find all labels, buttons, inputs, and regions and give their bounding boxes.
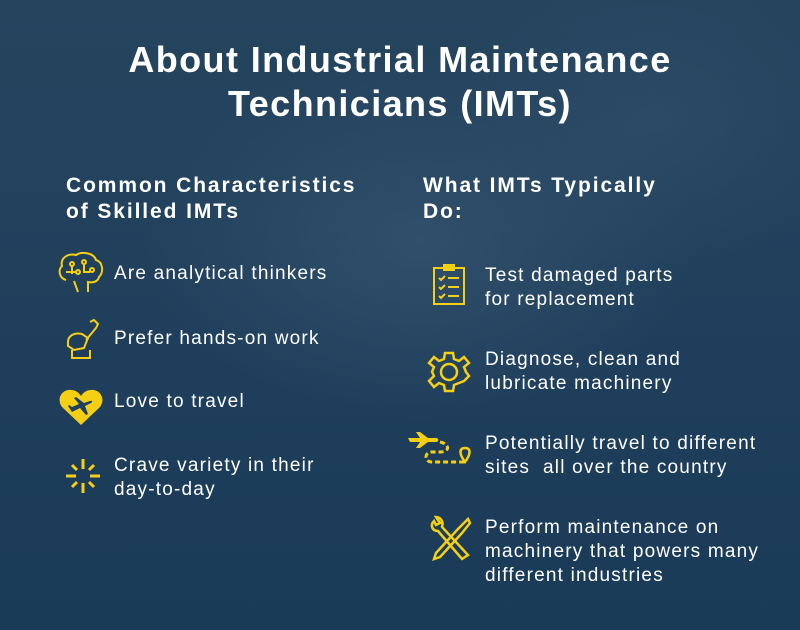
title xyxy=(128,39,672,124)
text: analytical: Are analytical thinkers xyxy=(114,263,327,284)
text: variety xyxy=(114,455,315,500)
text: variety: day-to-day xyxy=(114,479,216,500)
text: maintenance xyxy=(485,517,759,586)
icon: sparkle xyxy=(66,459,100,493)
heading: characteristics: of Skilled IMTs xyxy=(66,200,240,223)
text: travel sites: sites all over the country xyxy=(485,457,728,478)
text: diagnose xyxy=(485,349,681,394)
title: Technicians (IMTs) xyxy=(228,83,572,124)
icon: clipboard xyxy=(433,264,465,305)
heading: what IMTs do: What IMTs Typically xyxy=(423,174,657,197)
text: diagnose: Diagnose, clean and xyxy=(485,349,681,370)
text: travel: Love to travel xyxy=(114,391,245,412)
text: test parts xyxy=(485,265,673,310)
icon: gear xyxy=(427,352,471,392)
heading: what IMTs do xyxy=(423,174,657,223)
icon: heart plane xyxy=(60,390,102,425)
text: maintenance: Perform maintenance on xyxy=(485,517,719,538)
title: About Industrial Maintenance xyxy=(128,39,672,80)
heading: characteristics: Common Characteristics xyxy=(66,174,356,197)
icon: brain xyxy=(58,252,104,292)
text: test parts: Test damaged parts xyxy=(485,265,673,286)
text: hands-on: Prefer hands-on work xyxy=(114,328,320,349)
icon: hand with wrench xyxy=(67,318,100,359)
text: travel sites xyxy=(485,433,756,478)
text: maintenance: different industries xyxy=(485,565,664,586)
text: travel sites: Potentially travel to different xyxy=(485,433,756,454)
icon: tools xyxy=(430,516,472,561)
text: maintenance: machinery that powers many xyxy=(485,541,759,562)
icon: plane route xyxy=(408,432,471,464)
heading: what IMTs do: Do: xyxy=(423,200,464,223)
text: diagnose: lubricate machinery xyxy=(485,373,673,394)
text: variety: Crave variety in their xyxy=(114,455,315,476)
text: test parts: for replacement xyxy=(485,289,635,310)
heading: characteristics xyxy=(66,174,356,223)
